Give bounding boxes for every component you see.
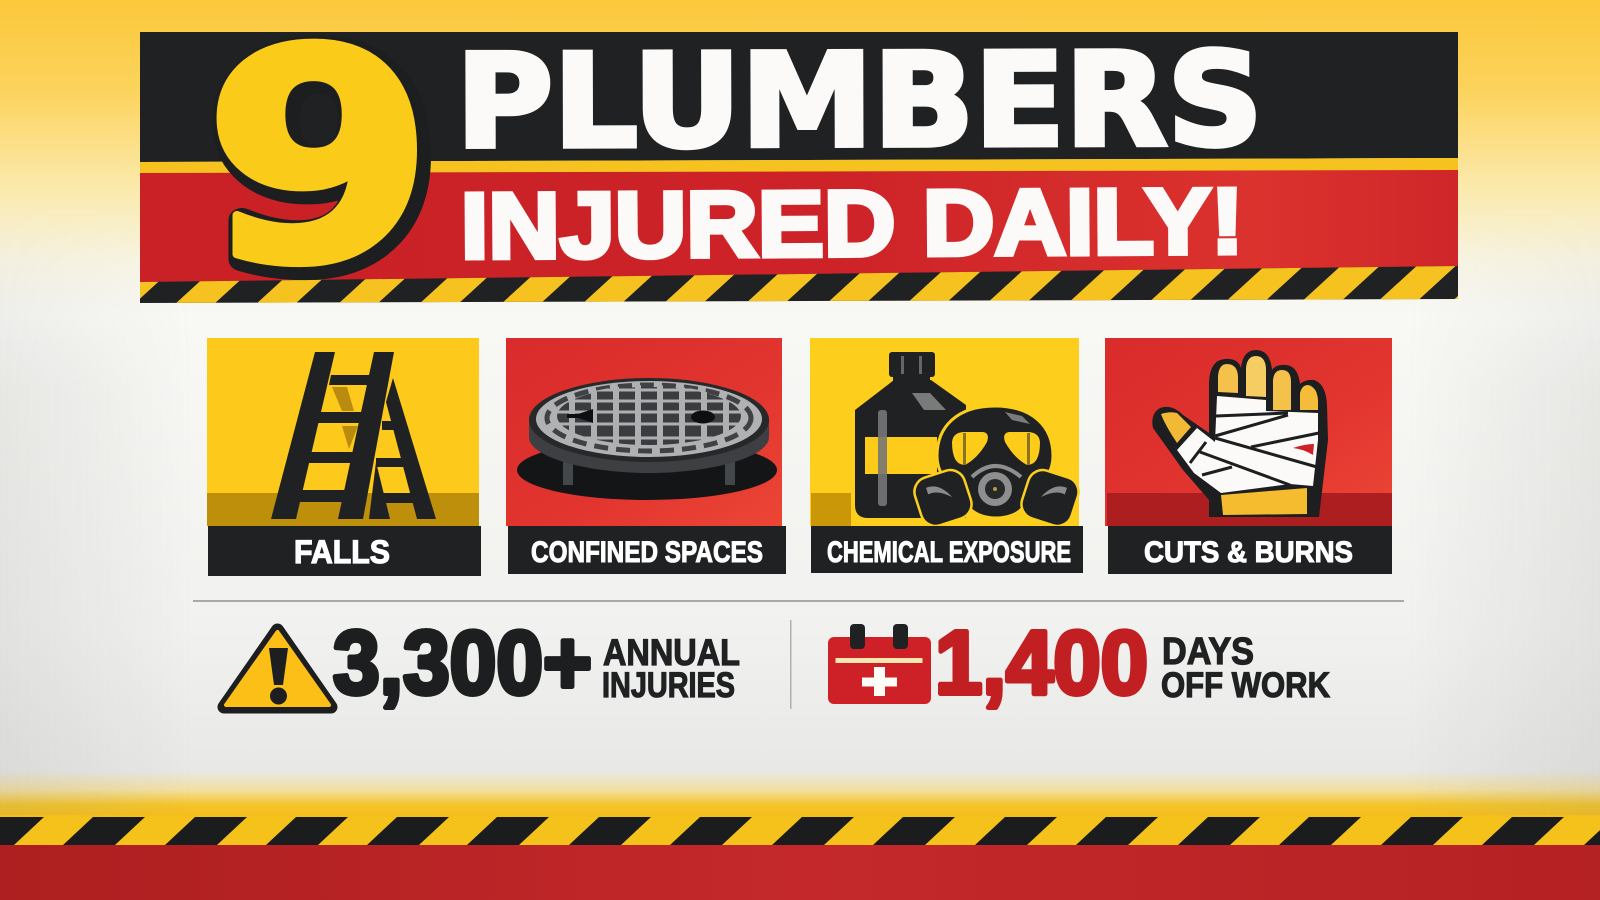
stat: days off work xyxy=(828,614,1330,714)
panel: confined spaces xyxy=(506,338,786,574)
panel: falls xyxy=(207,338,481,576)
stat number: 3,300+: 3,300+ xyxy=(333,614,592,714)
icon: chemical bottle xyxy=(855,352,966,518)
big number 9 outline: 9 xyxy=(209,0,439,333)
stat label: days: DAYS xyxy=(1162,631,1254,673)
icon: warning triangle xyxy=(224,630,331,707)
heading: plumbers: PLUMBERS xyxy=(456,25,1263,177)
footer red band xyxy=(0,845,1600,900)
icon: medical calendar xyxy=(828,624,931,704)
label bar: confined spaces xyxy=(508,526,786,574)
banner red band xyxy=(140,169,1458,283)
label: chemical exposure: CHEMICAL EXPOSURE xyxy=(827,536,1071,569)
icon: bandaged hand xyxy=(1152,350,1328,517)
label bar: cuts and burns xyxy=(1108,526,1392,574)
footer hazard stripe xyxy=(0,817,1600,845)
label bar: falls xyxy=(208,526,481,576)
label: cuts and burns: CUTS & BURNS xyxy=(1144,536,1353,569)
stat: annual injuries xyxy=(224,614,740,714)
banner yellow divider xyxy=(140,158,1458,173)
title banner xyxy=(140,32,1458,303)
label: falls: FALLS xyxy=(294,534,390,570)
icon: ladder xyxy=(271,352,436,519)
stat label: off work: OFF WORK xyxy=(1161,666,1330,705)
icon: mask right filter xyxy=(1018,466,1082,530)
panel: cuts and burns xyxy=(1105,338,1392,574)
banner black band xyxy=(140,32,1458,162)
heading: injured daily: INJURED DAILY! xyxy=(460,169,1244,278)
stat number: 1,400: 1,400 xyxy=(935,614,1148,714)
label bar: chemical exposure xyxy=(811,526,1083,573)
icon: gas mask xyxy=(911,406,1082,530)
stat label: annual: ANNUAL xyxy=(603,632,740,673)
icon: mask left filter xyxy=(911,466,975,530)
panel: chemical exposure xyxy=(810,338,1083,573)
icon: manhole cover xyxy=(517,378,777,500)
banner hazard stripe xyxy=(140,266,1458,303)
stat label: injuries: INJURIES xyxy=(602,666,735,705)
label: confined spaces: CONFINED SPACES xyxy=(531,536,763,569)
